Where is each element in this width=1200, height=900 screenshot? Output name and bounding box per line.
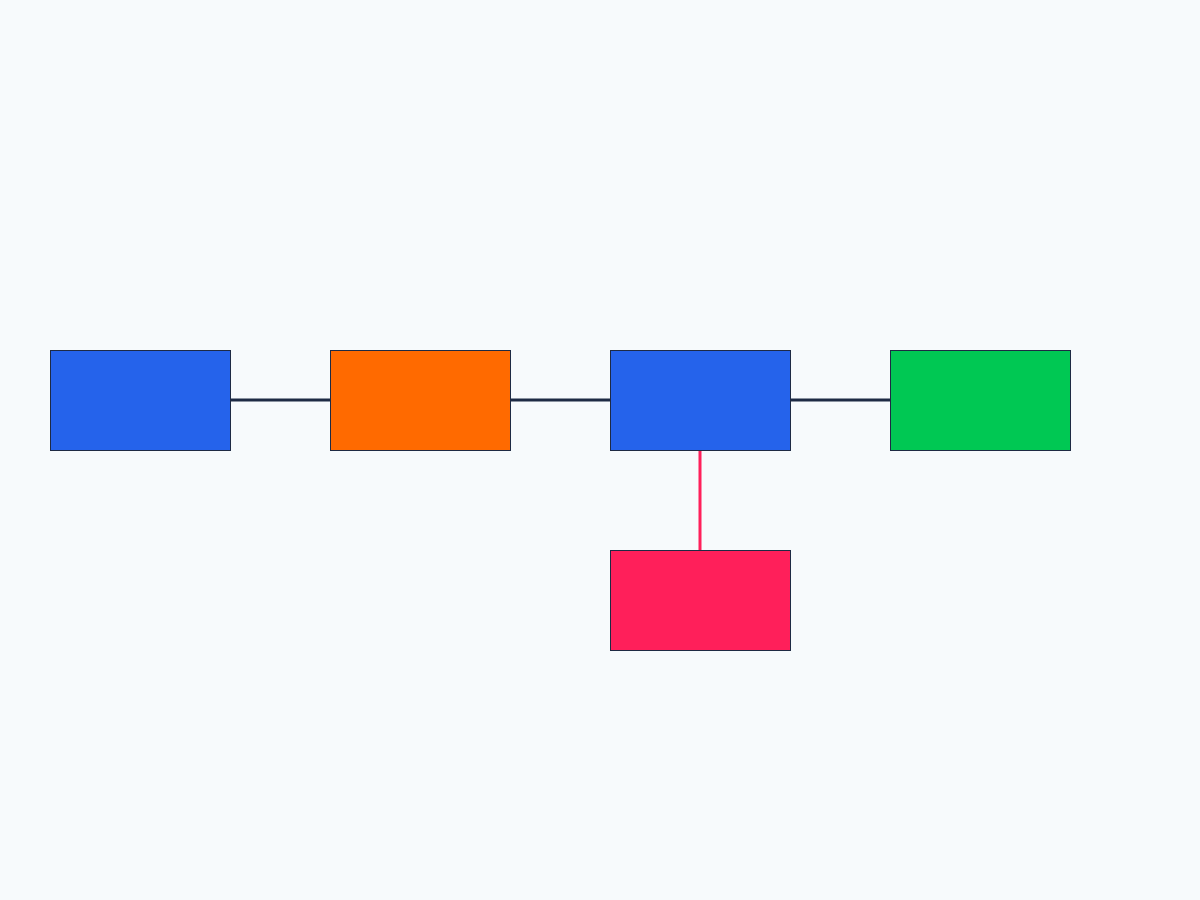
box 3 blue: [610, 350, 790, 450]
connector: box2 to box3: [510, 398, 610, 402]
connector: box3 to box5: [698, 450, 702, 550]
connector: box1 to box2: [230, 398, 330, 402]
box 5 red: [610, 550, 790, 650]
connector: box3 to box4: [790, 398, 890, 402]
box 4 green: [890, 350, 1070, 450]
box 1 blue: [50, 350, 230, 450]
box 2 orange: [330, 350, 510, 450]
